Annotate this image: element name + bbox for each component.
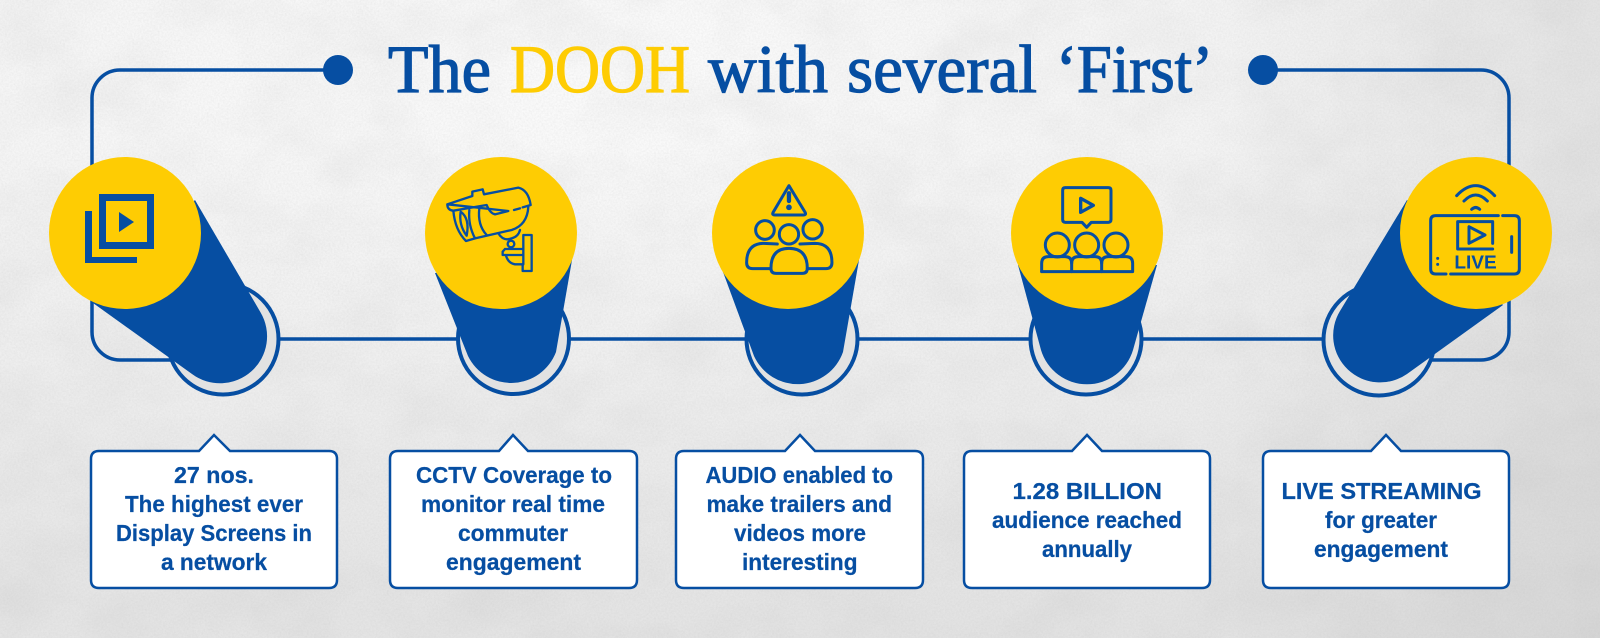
callout 4: 1.28 billion: audience reached bbox=[992, 507, 1182, 533]
title bbox=[388, 31, 1213, 107]
yellow circle 5 bbox=[1400, 157, 1552, 309]
icon: CCTV camera bbox=[447, 188, 532, 271]
callout 2: CCTV coverage: engagement bbox=[446, 549, 581, 575]
step 4: audience reach pin bbox=[1011, 157, 1163, 394]
title: ‘First’ bbox=[1056, 31, 1213, 107]
ring 4 bbox=[1030, 284, 1142, 394]
step 2: CCTV pin bbox=[425, 157, 577, 394]
callout 5: live streaming: for greater bbox=[1325, 507, 1437, 533]
yellow circle 1 bbox=[49, 157, 201, 309]
connector: horizontal timeline bbox=[223, 337, 1379, 341]
ring 3 bbox=[746, 284, 858, 394]
callout 3: audio enabled bbox=[676, 435, 923, 588]
callout 1: 27 nos. bbox=[91, 435, 337, 588]
connector: right frame line bbox=[1263, 70, 1509, 360]
icon: live stream bbox=[1431, 186, 1519, 274]
callout 3: audio enabled: AUDIO enabled to bbox=[706, 462, 893, 488]
icon: stacked video screens bbox=[85, 194, 154, 263]
callout 4: 1.28 billion bbox=[964, 435, 1210, 588]
callout 4: 1.28 billion: annually bbox=[1042, 536, 1132, 562]
icon: audience watching video bbox=[1042, 188, 1133, 272]
callout 1: 27 nos.: Display Screens in bbox=[116, 520, 312, 546]
callout 5: live streaming: LIVE STREAMING bbox=[1282, 478, 1482, 504]
yellow circle 3 bbox=[712, 157, 864, 309]
callout 1: 27 nos.: 27 nos. bbox=[174, 462, 254, 488]
callout 2: CCTV coverage: commuter bbox=[458, 520, 568, 546]
yellow circle 4 bbox=[1011, 157, 1163, 309]
callout 3: audio enabled: interesting bbox=[742, 549, 858, 575]
title: DOOH bbox=[510, 31, 690, 107]
icon: live stream: LIVE bbox=[1454, 251, 1497, 272]
callout 2: CCTV coverage: monitor real time bbox=[421, 491, 605, 517]
callout 3: audio enabled: videos more bbox=[734, 520, 866, 546]
callout 2: CCTV coverage: CCTV Coverage to bbox=[416, 462, 612, 488]
step 1: display screens pin bbox=[49, 157, 278, 394]
callout 5: live streaming bbox=[1263, 435, 1509, 588]
shadow beam 4 bbox=[1018, 265, 1157, 384]
callout 1: 27 nos.: a network bbox=[161, 549, 267, 575]
dot: title left bbox=[323, 55, 353, 85]
title: The bbox=[388, 31, 491, 107]
title: several bbox=[847, 31, 1037, 107]
shadow beam 2 bbox=[435, 260, 572, 383]
step 3: audio pin bbox=[712, 157, 864, 394]
shadow beam 1 bbox=[93, 200, 267, 383]
ring 1 bbox=[168, 284, 278, 394]
ring 2 bbox=[458, 283, 569, 394]
callout 3: audio enabled: make trailers and bbox=[706, 491, 892, 517]
callout 4: 1.28 billion: 1.28 BILLION bbox=[1012, 478, 1162, 504]
ring 5 bbox=[1324, 284, 1434, 396]
shadow beam 3 bbox=[723, 260, 859, 384]
callout 5: live streaming: engagement bbox=[1314, 536, 1448, 562]
yellow circle 2 bbox=[425, 157, 577, 309]
callout 1: 27 nos.: The highest ever bbox=[125, 491, 303, 517]
shadow beam 5 bbox=[1333, 200, 1503, 382]
callout 2: CCTV coverage bbox=[390, 435, 637, 588]
icon: audience with alert bbox=[747, 186, 832, 273]
dot: title right bbox=[1248, 55, 1278, 85]
title: with bbox=[708, 31, 828, 107]
connector: left frame line bbox=[92, 70, 338, 360]
step 5: live streaming pin bbox=[1324, 157, 1552, 396]
